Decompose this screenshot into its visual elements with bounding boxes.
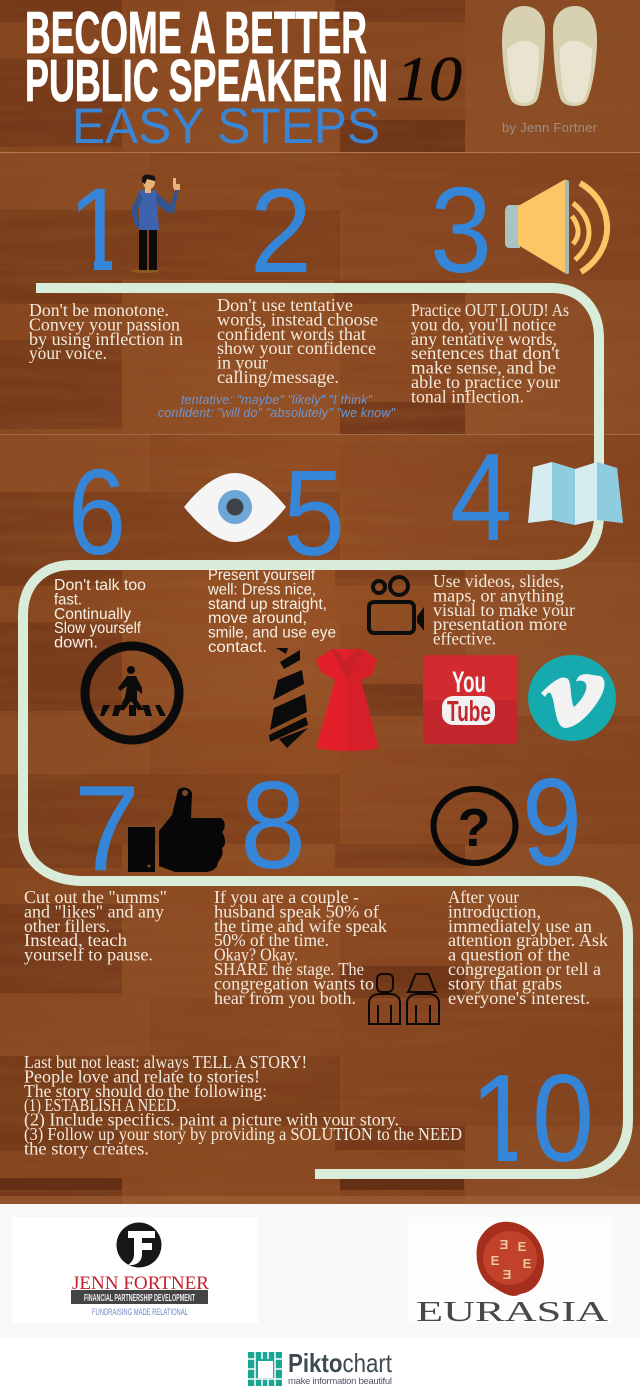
number 10: 10 [470,1050,594,1188]
text: step 1: by using inflection in [29,329,183,349]
title: EASY STEPS [72,98,380,154]
text: step 7: Instead, teach [24,930,127,950]
number 5: 5 [283,445,345,581]
text: step 10: The story should do the following: [24,1081,267,1101]
text: step 7: and "likes" and any [24,901,164,921]
text: step 8: SHARE the stage. The [214,959,364,979]
icon: presenter man [131,175,180,273]
text: step 5: smile, and use eye [208,625,336,642]
text: step 7: Cut out the "umms" [24,887,167,907]
icon: red dress [316,649,379,751]
text: step 10: (2) Include specifics. paint a picture with your story. [24,1110,399,1130]
text: step 3: tonal inflection. [411,386,524,406]
text: step 5 [207,567,336,656]
text: step 10: Last but not least: always TELL A STORY! [24,1052,307,1072]
title [25,0,462,154]
text: step 9: immediately use an [448,916,592,936]
text: step 6: down. [54,635,98,652]
text: step 5: contact. [208,639,267,656]
icon: YouTube: Tube [447,696,491,728]
icon: YouTube [423,655,518,744]
text: tentative and confident examples: confident: "will do" "absolutely" "we know" [158,406,396,420]
text: step 1: Convey your passion [29,314,180,334]
logo: Eurasia: E [491,1253,500,1268]
text: step 8: hear from you both. [214,988,356,1008]
icon: question mark circle: ? [458,798,490,858]
icon: footprints slippers [502,6,597,106]
text: step 4: effective. [433,629,496,649]
icon: pedestrian crossing [85,646,179,740]
text: step 3: any tentative words, [411,329,557,349]
text: step 1 [29,300,183,363]
text: step 2: confident words that [217,324,366,344]
icon: striped tie [269,648,308,748]
text: step 10: People love and relate to stories! [24,1066,260,1086]
text: step 8: congregation wants to [214,973,374,993]
title: BECOME A BETTER [25,0,367,66]
icon: video camera [369,577,423,633]
logo: Eurasia: E [518,1239,527,1254]
text: step 8: Okay? Okay. [214,945,298,965]
number 6: 6 [68,444,126,580]
icon: map [528,462,623,525]
icon: couple [369,974,439,1024]
text: step 4 [433,571,575,649]
text: step 5: Present yourself [208,567,316,584]
text: step 9: a question of the [448,945,570,965]
icon: thumbs up [128,788,225,872]
text: step 4: maps, or anything [433,585,564,605]
number 4: 4 [450,429,512,567]
text: step 4: visual to make your [433,600,575,620]
icon: Vimeo [528,655,616,741]
text: step 10: (1) ESTABLISH A NEED. [24,1095,180,1115]
text: step 8: 50% of the time. [214,930,329,950]
logo: Piktochart: make information beautiful [288,1376,392,1387]
text: step 6: fast. [54,591,82,608]
text: step 9: everyone's interest. [448,988,590,1008]
number 1: 1 [68,164,128,296]
text: step 10: the story creates. [24,1138,149,1158]
logo: Eurasia [416,1222,608,1328]
logo: Eurasia: E [523,1256,532,1271]
text: step 2 [217,295,378,387]
text: step 3: sentences that don't [411,343,560,363]
icon: eye [184,473,286,542]
text: step 8: the time and wife speak [214,916,387,936]
text: step 6: Don't talk too [54,577,146,594]
logo: Jenn Fortner [71,1222,209,1318]
path: winding track [23,288,628,1174]
logo: Jenn Fortner: JENN FORTNER [72,1273,209,1294]
text: step 6: Continually [54,606,131,623]
text: step 2: show your confidence [217,338,376,358]
logo: Jenn Fortner: FUNDRAISING MADE RELATIONAL [92,1307,188,1318]
logo: Eurasia: Ǝ [503,1267,511,1282]
text: step 9: introduction, [448,901,541,921]
number 3: 3 [430,162,492,298]
text: step 3: able to practice your [411,372,560,392]
title: 10 [396,43,462,114]
text: step 6 [54,577,146,652]
text: step 4: presentation more [433,614,567,634]
text: step 9: attention grabber. Ask [448,930,608,950]
text: step 10: (3) Follow up your story by providing a SOLUTION to the NEED [24,1124,462,1144]
number 7: 7 [74,760,140,896]
text: step 3: Practice OUT LOUD! As [411,300,569,320]
byline: by Jenn Fortner [502,120,598,135]
logo: Piktochart [248,1348,393,1387]
logo: Eurasia: Ǝ [500,1237,508,1252]
text: step 6: Slow yourself [54,620,142,637]
number 9: 9 [522,754,582,892]
text: step 1: your voice. [29,343,107,363]
text: tentative and confident examples: tentative: "maybe" "likely" "I think" [181,393,373,407]
text: step 3: make sense, and be [411,358,556,378]
panel: sponsor strip [0,1204,640,1338]
text: step 7: other fillers. [24,916,110,936]
text: step 2: in your [217,353,268,373]
text: step 2: calling/message. [217,367,339,387]
text: step 4: Use videos, slides, [433,571,564,591]
text: step 10 [24,1052,462,1158]
text: step 2: Don't use tentative [217,295,353,315]
text: step 8 [214,887,387,1008]
text: step 5: move around, [208,610,307,627]
logo: Jenn Fortner: FINANCIAL PARTNERSHIP DEVELOPMENT [84,1293,195,1304]
number 8: 8 [240,757,306,895]
text: step 2: words, instead choose [217,309,378,329]
icon: question mark circle [434,789,516,863]
text: step 3 [411,300,569,406]
number 2: 2 [250,164,312,298]
text: step 8: husband speak 50% of [214,901,379,921]
icon: YouTube: You [452,666,486,699]
text: step 5: well: Dress nice, [207,581,316,598]
text: step 1: Don't be monotone. [29,300,169,320]
text: step 9: story that grabs [448,973,562,993]
icon: speaker [505,180,607,274]
text: step 9: congregation or tell a [448,959,601,979]
logo: Piktochart: Piktochart [288,1348,393,1378]
text: step 9 [448,887,608,1008]
logo: Eurasia: EURASIA [416,1296,608,1328]
text: step 3: you do, you'll notice [411,314,556,334]
text: step 8: If you are a couple - [214,887,359,907]
text: step 7 [24,887,167,965]
title: PUBLIC SPEAKER IN [25,48,388,114]
text: tentative and confident examples [158,393,396,420]
text: step 5: stand up straight, [208,596,327,613]
text: step 9: After your [448,887,519,907]
text: step 7: yourself to pause. [24,945,153,965]
